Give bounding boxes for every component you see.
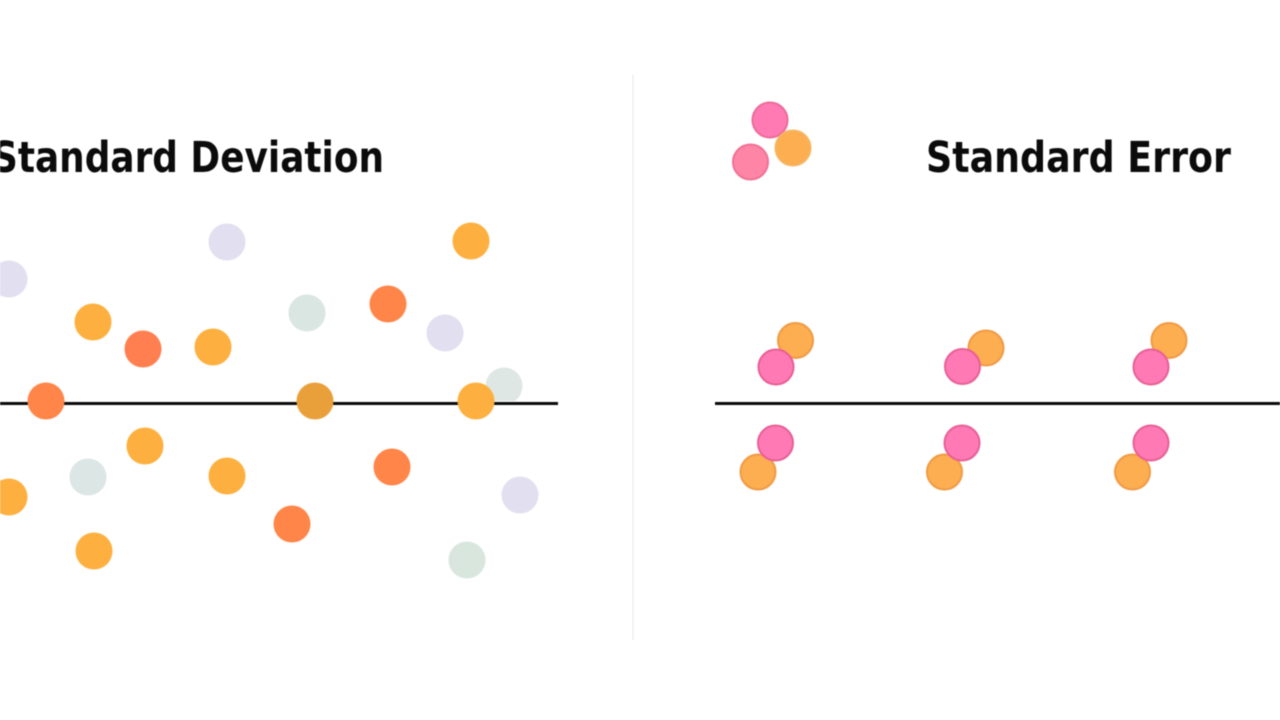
mean line: standard error bbox=[715, 402, 1280, 405]
data points: standard deviation scatter bbox=[0, 222, 538, 578]
heading: standard deviation: Standard Deviation bbox=[0, 133, 384, 183]
sample pairs below line bbox=[740, 426, 1168, 490]
comparison infographic bbox=[0, 75, 1280, 640]
heading: standard error: Standard Error bbox=[926, 133, 1232, 183]
sample pairs above line bbox=[758, 323, 1186, 384]
mean line: standard deviation bbox=[0, 402, 558, 405]
panel: standard deviation bbox=[0, 133, 558, 578]
panel: standard error bbox=[715, 102, 1280, 490]
sample cluster icon bbox=[733, 102, 810, 180]
